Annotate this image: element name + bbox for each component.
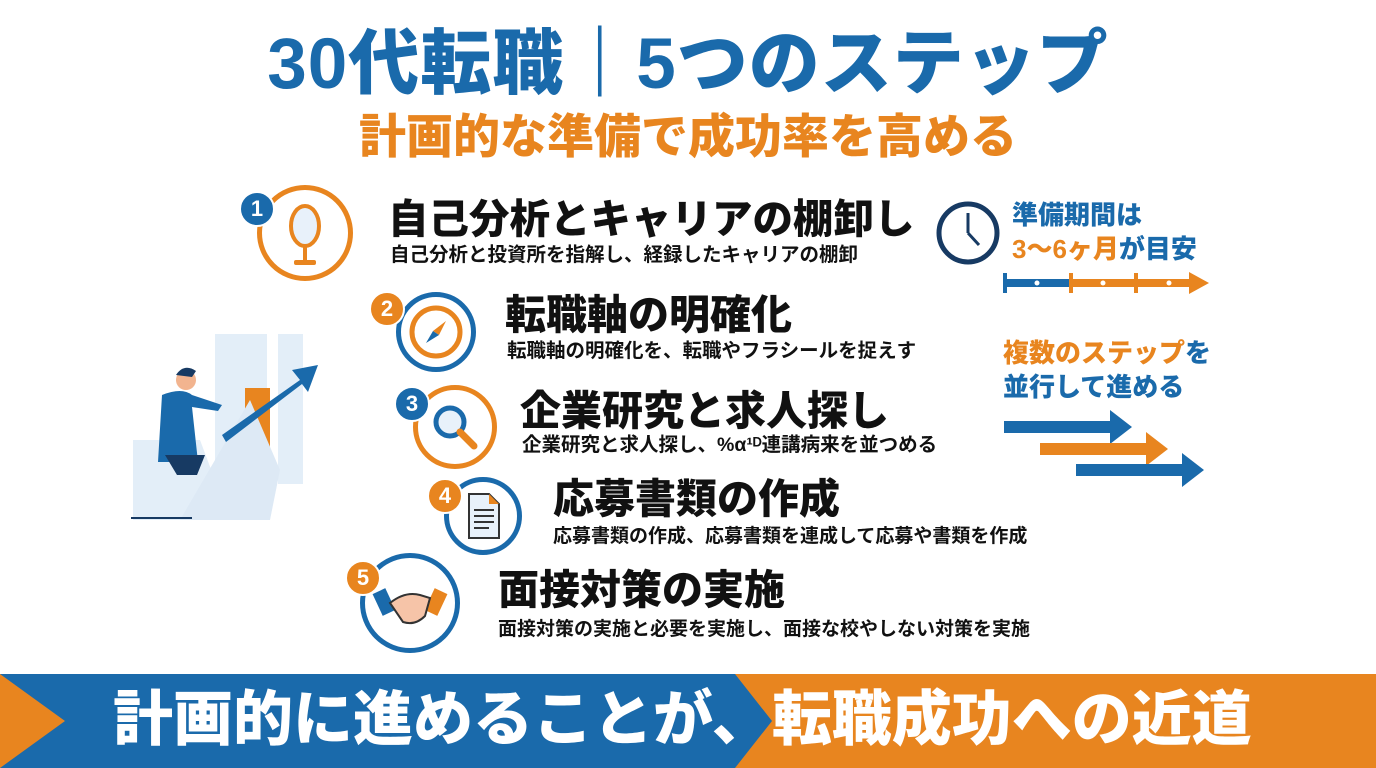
step 4 title: 応募書類の作成 [553,476,840,522]
step 2 title: 転職軸の明確化 [505,292,792,338]
step 1 text: 自己分析と投資所を指解し、経録したキャリアの棚卸 [390,244,858,266]
step 1 [241,185,914,281]
step 1 title: 自己分析とキャリアの棚卸し [388,196,914,242]
icon: mirror [257,185,353,281]
badge 2 [369,291,405,327]
bottom banner [0,674,1376,768]
badge 2: 2 [381,296,393,321]
banner text: 計画的に進めることが、転職成功への近道 [113,686,1252,753]
badge 3: 3 [406,391,418,416]
timeline arrow [1003,272,1209,294]
callout text 2 [1003,338,1211,402]
badge 5: 5 [357,565,369,590]
icon: compass [396,292,476,372]
badge 5 [345,560,381,596]
step 5 title: 面接対策の実施 [498,567,785,613]
callout: parallel steps [1003,338,1211,487]
callout text 2: 複数のステップを [1003,338,1211,368]
callout text: 3〜6ヶ月が目安 [1012,234,1197,264]
step 4 [429,476,1027,555]
callout text [1012,200,1197,264]
step 3 title: 企業研究と求人探し [520,388,889,434]
callout text 2: 並行して進める [1003,372,1184,402]
step 2 [371,292,916,372]
callout text: 準備期間は [1012,200,1142,230]
step 5 [347,553,1030,653]
step 3 text: 企業研究と求人探し、%α¹ᴰ連講病来を並つめる [522,434,937,456]
icon: handshake [360,553,460,653]
badge 3 [394,386,430,422]
badge 1 [239,191,275,227]
parallel arrows [1004,410,1204,487]
title: 30代転職｜5つのステップ [267,25,1109,104]
badge 4 [427,478,463,514]
step 5 text: 面接対策の実施と必要を実施し、面接な校やしない対策を実施 [498,619,1030,640]
badge 4: 4 [439,483,451,508]
badge 1: 1 [251,196,263,221]
step 4 text: 応募書類の作成、応募書類を連成して応募や書類を作成 [553,526,1027,547]
icon: document [444,477,522,555]
icon: magnifier [413,385,497,469]
illustration: climbing man [131,334,318,520]
subtitle: 計画的な準備で成功率を高める [359,110,1017,163]
icon: clock [936,202,1000,264]
callout: preparation period [936,200,1209,294]
step 2 text: 転職軸の明確化を、転職やフラシールを捉えす [507,340,916,362]
step 3 [396,385,937,469]
